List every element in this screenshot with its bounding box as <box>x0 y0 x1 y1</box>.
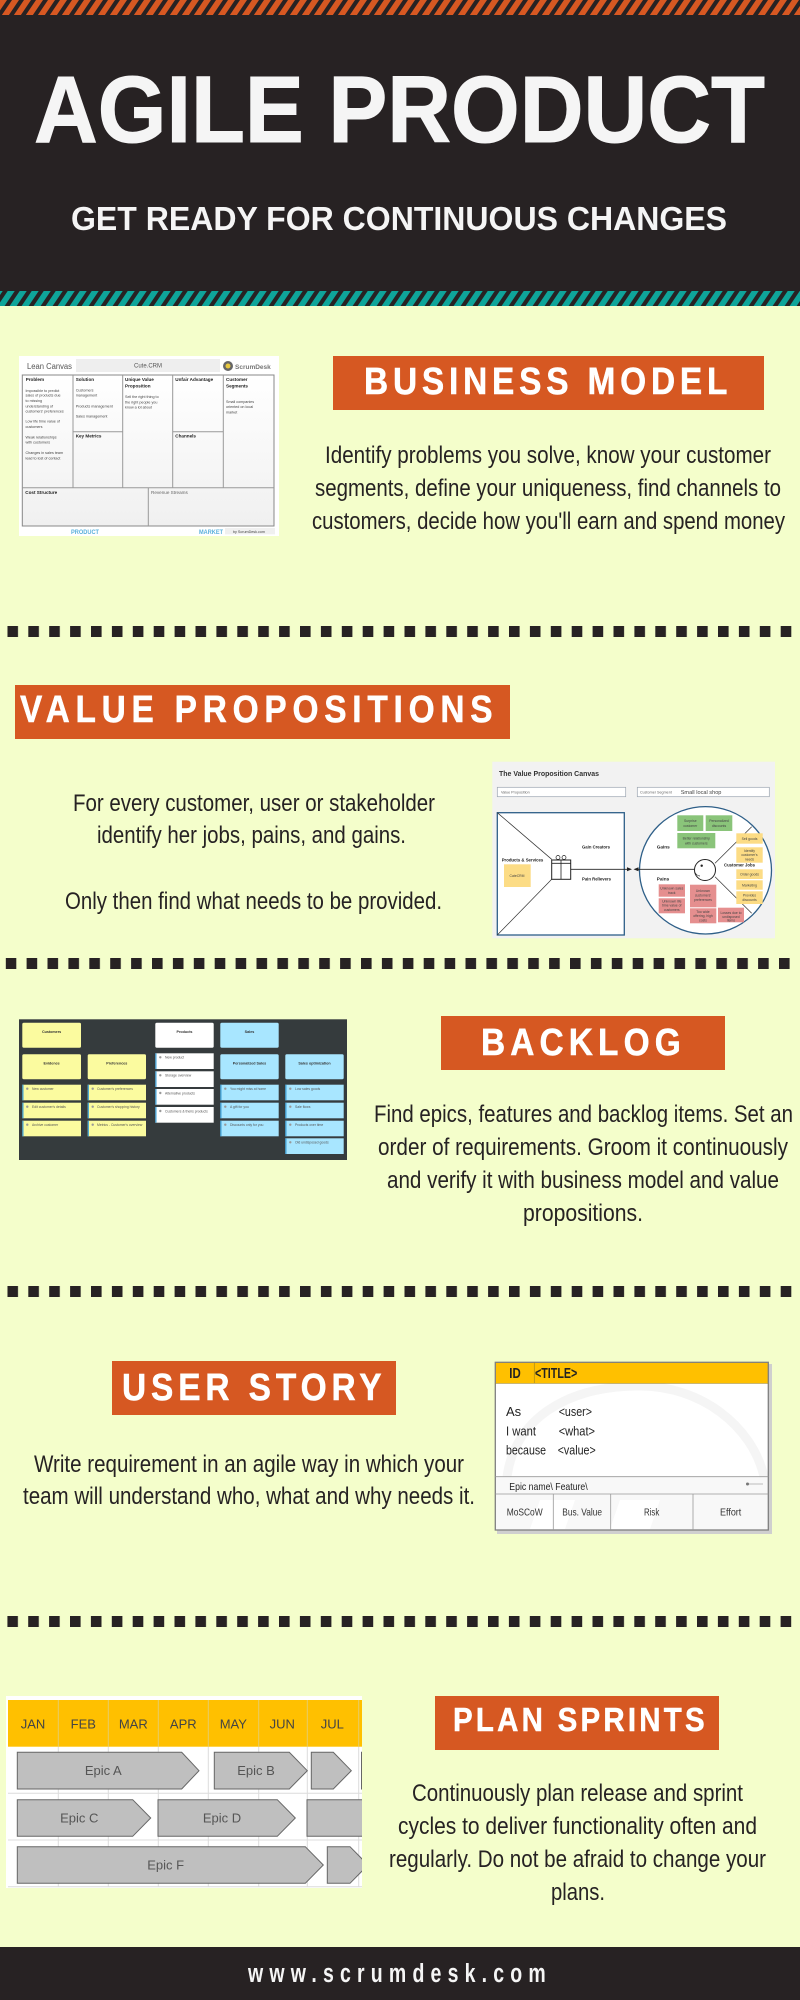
heading: value propositions: VALUE PROPOSITIONS <box>20 688 493 730</box>
image: lean canvas: Revenue Streams <box>151 490 188 495</box>
image: lean canvas: Segments <box>226 383 248 388</box>
image: value proposition canvas: Unknown <box>696 889 710 893</box>
image: backlog story map: New customer <box>32 1087 55 1091</box>
image: value proposition canvas: Unknown life <box>662 900 682 904</box>
image: lean canvas: management <box>76 394 97 398</box>
heading: backlog: BACKLOG <box>481 1021 681 1063</box>
image: lean canvas: Low life time value of <box>26 420 61 424</box>
image: lean canvas: Problem <box>26 377 44 382</box>
panel: value propositions <box>15 685 510 915</box>
image: backlog story map: Sales <box>245 1030 254 1034</box>
arrow: epic C: Epic C <box>60 1810 98 1825</box>
image: release roadmap: MAR <box>119 1716 148 1731</box>
image: backlog story map: Archive customer <box>32 1123 59 1127</box>
image: value proposition canvas: with customers <box>685 842 708 846</box>
image: backlog story map: Discounts only for you <box>230 1123 263 1127</box>
image: user story card: <TITLE> <box>535 1365 577 1382</box>
arrow: epic C <box>17 1800 151 1836</box>
image: value proposition canvas: Identify <box>744 849 755 853</box>
image: user story card: Effort <box>720 1507 741 1519</box>
image: value proposition canvas: Products & Services <box>502 857 544 862</box>
image: lean canvas: market <box>226 410 237 414</box>
image: user story card: <value> <box>558 1443 596 1458</box>
image: backlog story map: Edit customer's details <box>32 1105 66 1109</box>
image: lean canvas: Sales management <box>76 415 107 419</box>
image: lean canvas: the right people you <box>125 400 157 404</box>
image: backlog story map: New product <box>165 1056 184 1060</box>
image: user story card: ID <box>509 1365 521 1382</box>
image: backlog story map: Storage overview <box>165 1074 192 1078</box>
text: value propositions description <box>65 790 442 915</box>
image: lean canvas: Cute.CRM <box>134 364 162 370</box>
image: backlog story map: Old undisposed goods <box>295 1141 329 1145</box>
image: value proposition canvas: discounts <box>712 824 726 828</box>
heading: plan sprints <box>435 1696 719 1750</box>
image: release roadmap: FEB <box>71 1716 96 1731</box>
text: plan sprints description: plans. <box>551 1879 605 1906</box>
image: backlog story map: A gift for you <box>230 1105 249 1109</box>
image: backlog story map: Alternative products <box>165 1091 195 1095</box>
image: value proposition canvas: customer <box>683 824 698 828</box>
image: value proposition canvas: Gains <box>657 844 670 849</box>
image: backlog story map: Customer's shopping history <box>97 1105 140 1109</box>
image: lean canvas: customers <box>26 425 43 429</box>
image: value proposition canvas: Personalized <box>709 819 729 823</box>
arrow: epic D <box>158 1800 295 1836</box>
image: user story card: <what> <box>559 1424 595 1439</box>
image: value proposition canvas: Value Proposition <box>501 790 530 794</box>
image: value proposition canvas: items <box>727 918 735 922</box>
text: business model description <box>312 442 786 535</box>
text: user story description: Write requirement in an agile way in which your <box>34 1451 464 1478</box>
image: backlog story map: Preferences <box>106 1062 127 1066</box>
image: value proposition canvas: preferences <box>694 898 712 902</box>
image: backlog story map: You might miss at home <box>230 1087 266 1091</box>
image: value proposition canvas: CateCRM <box>510 874 525 878</box>
image: backlog story map: Products over time <box>295 1123 323 1127</box>
footer url: www.scrumdesk.com <box>247 1958 546 1988</box>
image: release roadmap: JUN <box>270 1716 295 1731</box>
image: backlog story map: Customer's preferences <box>97 1087 133 1091</box>
image: lean canvas: Customers <box>76 389 94 393</box>
image: backlog story map: Low sales goods <box>295 1087 321 1091</box>
image: value proposition canvas: Marketing <box>742 884 757 888</box>
image: backlog story map: Personalized Sales <box>233 1062 266 1066</box>
footer <box>0 1947 800 2000</box>
image: value proposition canvas: Pains <box>657 876 670 881</box>
image: release roadmap <box>6 1696 375 1888</box>
arrow: cropped epic <box>306 1799 362 1837</box>
image: user story card <box>495 1362 772 1534</box>
image: backlog story map: Products <box>177 1030 192 1034</box>
image: value proposition canvas: needs <box>745 858 754 862</box>
image: value proposition canvas: customer's <box>741 853 758 857</box>
heading: backlog <box>441 1016 725 1070</box>
header band <box>0 0 800 306</box>
heading: business model <box>333 356 764 410</box>
image: lean canvas: PRODUCT <box>71 530 99 536</box>
image: value proposition canvas: Customer Segment <box>640 790 672 794</box>
text: value propositions description: identify her jobs, pains, and gains. <box>97 822 406 849</box>
image: lean canvas: know a lot about <box>125 405 152 409</box>
image: lean canvas: Small companies <box>226 400 254 404</box>
image: release roadmap: MAY <box>220 1716 247 1731</box>
image: release roadmap: JUL <box>321 1716 344 1731</box>
text: plan sprints description: Continuously plan release and sprint <box>412 1780 743 1807</box>
arrow: epic B <box>214 1752 307 1789</box>
image: lean canvas: with customers <box>26 441 50 445</box>
image: lean canvas: Lean Canvas <box>27 362 72 371</box>
image: value proposition canvas: offering, high <box>693 914 713 918</box>
text: plan sprints description <box>389 1780 766 1906</box>
title: AGILE PRODUCT <box>34 57 765 163</box>
text: backlog description <box>374 1101 793 1227</box>
heading: plan sprints: PLAN SPRINTS <box>453 1700 705 1738</box>
image: lean canvas: Unique Value <box>125 377 154 382</box>
image: user story card: because <box>506 1443 546 1458</box>
panel: plan sprints <box>389 1696 766 1906</box>
image: lean canvas: Channels <box>175 434 196 439</box>
image: lean canvas: by ScrumDesk.com <box>233 530 265 534</box>
image: lean canvas: customers' preferences <box>26 410 64 414</box>
arrow: cropped final epic <box>327 1847 368 1883</box>
image: lean canvas: lead to lost of contact <box>26 456 60 460</box>
text: user story description: team will understand who, what and why needs it. <box>23 1483 475 1510</box>
heading: business model: BUSINESS MODEL <box>364 360 727 402</box>
arrow: epic B: Epic B <box>237 1763 275 1778</box>
image: value proposition canvas: track <box>668 891 676 895</box>
text: user story description <box>23 1451 475 1510</box>
image: value proposition canvas: Customer Jobs <box>724 862 755 867</box>
image: value proposition canvas <box>492 762 775 938</box>
text: backlog description: propositions. <box>523 1200 643 1227</box>
image: backlog story map <box>19 1019 347 1160</box>
image: lean canvas: Proposition <box>125 383 151 388</box>
arrow: unnamed epic <box>311 1752 351 1789</box>
image: backlog story map: Customers <box>42 1030 61 1034</box>
image: lean canvas: understanding of <box>26 404 54 408</box>
image: release roadmap: JAN <box>21 1716 45 1731</box>
image: value proposition canvas: Better relationship <box>683 836 710 840</box>
image: lean canvas: to missing <box>26 399 42 403</box>
image: lean canvas: Weak relationships <box>26 435 57 439</box>
image: backlog story map: Evidence <box>43 1062 60 1066</box>
image: backlog story map: Sales optimization <box>298 1062 331 1066</box>
image: release roadmap: APR <box>170 1716 197 1731</box>
heading: user story: USER STORY <box>122 1366 382 1408</box>
image: value proposition canvas: Small local shop <box>681 790 721 796</box>
panel: user story <box>23 1361 475 1510</box>
image: lean canvas: Impossible to predict <box>26 389 59 393</box>
arrow: epic A: Epic A <box>85 1763 122 1778</box>
arrow: epic F: Epic F <box>147 1857 184 1872</box>
image: value proposition canvas: time value of <box>662 904 681 908</box>
image: lean canvas: Cost Structure <box>25 490 58 495</box>
image: value proposition canvas: Unknown sales <box>660 886 684 890</box>
image: lean canvas: MARKET <box>199 530 223 536</box>
image: lean canvas: oriented on local <box>226 405 253 409</box>
image: user story card: As <box>506 1404 522 1419</box>
image: value proposition canvas: costs <box>699 918 707 922</box>
image: user story card: Bus. Value <box>562 1507 602 1519</box>
arrow: epic A <box>17 1752 199 1789</box>
image: backlog story map: Customers & theirs products <box>165 1109 208 1113</box>
panel: business model <box>312 356 786 535</box>
image: value proposition canvas: Order goods <box>740 872 759 876</box>
image: value proposition canvas: undisposed <box>722 915 740 919</box>
image: value proposition canvas: The Value Proposition Canvas <box>499 769 599 778</box>
image: value proposition canvas: discounts <box>742 898 757 902</box>
image: value proposition canvas: Losses due to <box>720 911 742 915</box>
image: value proposition canvas: Gain Creators <box>582 844 610 849</box>
panel: backlog <box>374 1016 793 1227</box>
image: lean canvas <box>19 356 279 536</box>
image: user story card: I want <box>506 1424 536 1439</box>
image: value proposition canvas: Surprise <box>684 819 697 823</box>
arrow: epic F <box>17 1847 323 1883</box>
image: value proposition canvas: Provides <box>743 894 756 898</box>
image: lean canvas: sales of products due <box>26 394 61 398</box>
image: value proposition canvas: Sell goods <box>742 837 758 841</box>
subtitle: GET READY FOR CONTINUOUS CHANGES <box>71 201 727 238</box>
arrow: epic D: Epic D <box>203 1810 241 1825</box>
image: user story card: Epic name\ Feature\ <box>509 1481 588 1493</box>
image: value proposition canvas: customers' <box>695 894 711 898</box>
image: lean canvas: Key Metrics <box>76 434 102 439</box>
image: backlog story map: Metrics - Customer's overview <box>97 1123 143 1127</box>
image: lean canvas: Unfair Advantage <box>175 377 214 382</box>
image: lean canvas: Solution <box>76 377 94 382</box>
image: backlog story map: Sale flows <box>295 1105 311 1109</box>
image: user story card: <user> <box>559 1404 592 1419</box>
text: value propositions description: For every customer, user or stakeholder <box>73 790 435 817</box>
image: lean canvas: ScrumDesk <box>235 364 271 371</box>
image: lean canvas: Products management <box>76 404 113 408</box>
image: lean canvas: Sell the right thing to <box>125 395 159 399</box>
image: value proposition canvas: Pain Relievers <box>582 876 611 881</box>
image: user story card: MoSCoW <box>507 1507 543 1519</box>
image: value proposition canvas: customers <box>664 908 680 912</box>
image: lean canvas: Changes in sales team <box>26 451 63 455</box>
image: value proposition canvas: Too wide <box>696 910 710 914</box>
text: value propositions description: Only then find what needs to be provided. <box>65 888 442 915</box>
image: user story card: Risk <box>644 1507 660 1519</box>
image: lean canvas: Customer <box>226 377 248 382</box>
